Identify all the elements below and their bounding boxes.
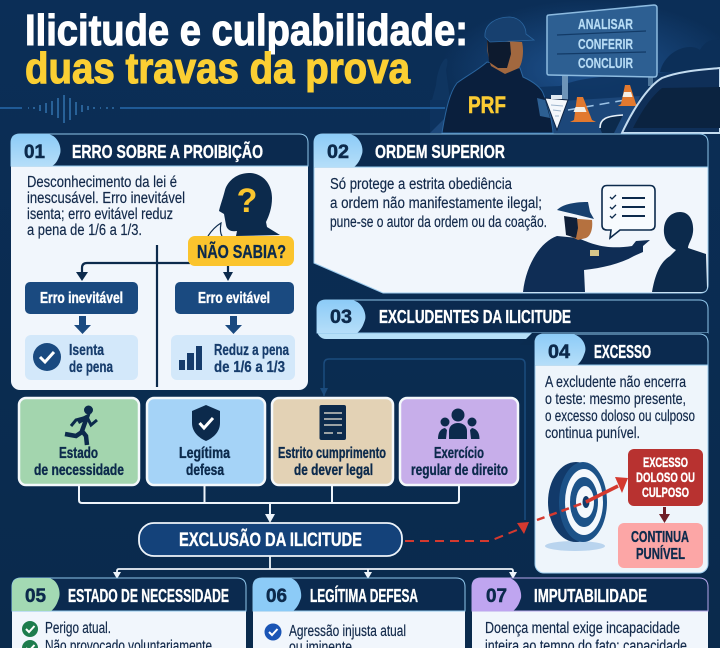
list item xyxy=(264,623,406,648)
box: continua punível xyxy=(618,523,703,568)
icon: traffic cones xyxy=(570,85,639,122)
panel: 01 erro sobre a proibição: 01 xyxy=(24,142,45,163)
list items: Perigo atual. xyxy=(45,620,111,637)
connector outline: excludentes frame xyxy=(320,359,525,520)
icon: PRF officer from behind xyxy=(442,17,553,133)
panel: 04 excesso: 04 xyxy=(548,342,570,363)
icon: PRF officer from behind: PRF xyxy=(468,92,506,119)
panel: 06 legítima defesa xyxy=(253,578,465,648)
panel: 02 ordem superior xyxy=(314,134,708,293)
card: estrito cumprimento de dever legal: de dever legal xyxy=(294,462,373,479)
flow connectors xyxy=(76,245,233,387)
result: isenta de pena: de pena xyxy=(69,359,113,376)
box: excesso doloso ou culposo: DOLOSO OU xyxy=(636,469,695,485)
panel: 03 excludentes da ilicitude: EXCLUDENTES DA ILICITUDE xyxy=(379,307,571,327)
card: estado de necessidade: de necessidade xyxy=(34,462,124,479)
panel: 06 legítima defesa: LEGÍTIMA DEFESA xyxy=(310,585,418,606)
panel: 02 ordem superior: 02 xyxy=(327,142,349,163)
icon: road sign: ANALISAR xyxy=(578,16,633,33)
connectors: exclusão to panels xyxy=(113,556,517,579)
card: estado de necessidade xyxy=(19,398,139,485)
text block: o teste: mesmo presente, xyxy=(545,391,686,408)
panel: 06 legítima defesa: 06 xyxy=(266,586,287,607)
icon: patrol car xyxy=(600,68,720,133)
icon: head silhouette with question mark: ? xyxy=(237,182,257,220)
card: estrito cumprimento de dever legal xyxy=(272,398,393,485)
text block: pune-se o autor da ordem ou da coação. xyxy=(330,214,547,231)
icon: target xyxy=(545,462,607,551)
box: excesso doloso ou culposo xyxy=(628,449,703,506)
panel: 03 excludentes da ilicitude: 03 xyxy=(330,307,352,328)
icon: road sign: CONFERIR xyxy=(578,36,633,53)
icon: document xyxy=(320,405,346,440)
result: reduz a pena xyxy=(171,335,295,380)
card: estado de necessidade: Estado xyxy=(59,445,98,462)
box: continua punível: CONTINUA xyxy=(631,529,689,546)
result: reduz a pena: de 1/6 a 1/3 xyxy=(214,359,285,376)
text block xyxy=(330,176,547,231)
panel: 04 excesso xyxy=(535,334,708,573)
icon: audio waveform xyxy=(0,95,445,123)
icon: clipboard xyxy=(545,95,568,130)
list items xyxy=(22,620,212,648)
icon: speech bubble checklist xyxy=(602,186,655,238)
header illustration: night road scene xyxy=(430,0,720,140)
icon: people xyxy=(438,408,480,439)
result: isenta de pena xyxy=(25,335,138,380)
callout: não sabia xyxy=(188,236,294,266)
text block: inescusável. Erro inevitável xyxy=(27,190,185,207)
text block: a pena de 1/6 a 1/3. xyxy=(27,222,142,239)
callout: não sabia: NÃO SABIA? xyxy=(197,241,286,262)
panel: 07 imputabilidade: 07 xyxy=(486,586,507,607)
box: exclusão da ilicitude: EXCLUSÃO DA ILICITUDE xyxy=(179,529,362,551)
text block: Só protege a estrita obediência xyxy=(330,176,512,193)
panel: 05 estado de necessidade: 05 xyxy=(25,586,46,607)
card: legítima defesa: defesa xyxy=(186,462,224,479)
panel: 03 excludentes da ilicitude xyxy=(317,300,708,345)
card: legítima defesa: Legítima xyxy=(179,445,230,462)
icon: shield check xyxy=(192,405,220,441)
box: exclusão da ilicitude xyxy=(139,523,402,556)
box: erro inevitável xyxy=(25,282,138,314)
icon: officer pointing xyxy=(523,202,650,292)
arrow: dashed red to excesso xyxy=(405,522,529,541)
list item: Agressão injusta atual xyxy=(289,623,406,640)
panel: 01 erro sobre a proibição: ERRO SOBRE A PROIBIÇÃO xyxy=(72,141,263,162)
icon: civilian silhouette xyxy=(652,212,707,292)
text block: isenta; erro evitável reduz xyxy=(27,206,173,223)
result: reduz a pena: Reduz a pena xyxy=(214,342,289,359)
panel: 05 estado de necessidade: ESTADO DE NECESSIDADE xyxy=(68,586,229,606)
card: exercício regular de direito xyxy=(400,398,518,485)
panel: 02 ordem superior: ORDEM SUPERIOR xyxy=(375,142,505,162)
text block xyxy=(27,174,185,239)
icon: head silhouette with question mark xyxy=(208,173,280,236)
title: Ilicitude e culpabilidade: xyxy=(25,6,468,55)
text block: Desconhecimento da lei é xyxy=(27,174,177,191)
box: excesso doloso ou culposo: EXCESSO xyxy=(643,454,688,470)
box: erro evitável: Erro evitável xyxy=(198,290,270,307)
card: exercício regular de direito: regular de direito xyxy=(411,462,508,479)
text block: A excludente não encerra xyxy=(545,374,686,391)
arrow: excesso to punível xyxy=(659,507,670,523)
text block: a ordem não manifestamente ilegal; xyxy=(330,195,542,212)
arrow: red through target xyxy=(537,477,628,520)
text block: Doença mental exige incapacidade xyxy=(485,620,680,637)
connectors: cards to exclusão xyxy=(79,486,459,523)
text block: continua punível. xyxy=(545,425,640,442)
panel: 04 excesso: EXCESSO xyxy=(594,342,651,362)
arrows xyxy=(74,316,242,334)
icon: road sign: CONCLUIR xyxy=(578,55,633,72)
text block xyxy=(545,374,695,442)
title: duas travas da prova xyxy=(25,44,410,93)
box: erro evitável xyxy=(175,282,294,314)
icon: road sign xyxy=(547,5,657,102)
panel: 01 erro sobre a proibição xyxy=(11,134,308,390)
panel: 07 imputabilidade: IMPUTABILIDADE xyxy=(534,586,647,606)
card: estrito cumprimento de dever legal: Estrito cumprimento xyxy=(278,445,386,462)
card: legítima defesa xyxy=(147,398,265,485)
card: exercício regular de direito: Exercício xyxy=(434,445,484,462)
panel: 05 estado de necessidade xyxy=(12,578,246,648)
panel: 07 imputabilidade xyxy=(472,578,708,648)
box: continua punível: PUNÍVEL xyxy=(636,546,685,563)
icon: running person xyxy=(65,406,97,445)
box: erro inevitável: Erro inevitável xyxy=(40,290,123,307)
result: isenta de pena: Isenta xyxy=(69,342,104,359)
text block xyxy=(485,620,687,648)
title xyxy=(25,6,468,93)
box: excesso doloso ou culposo: CULPOSO xyxy=(642,484,689,500)
